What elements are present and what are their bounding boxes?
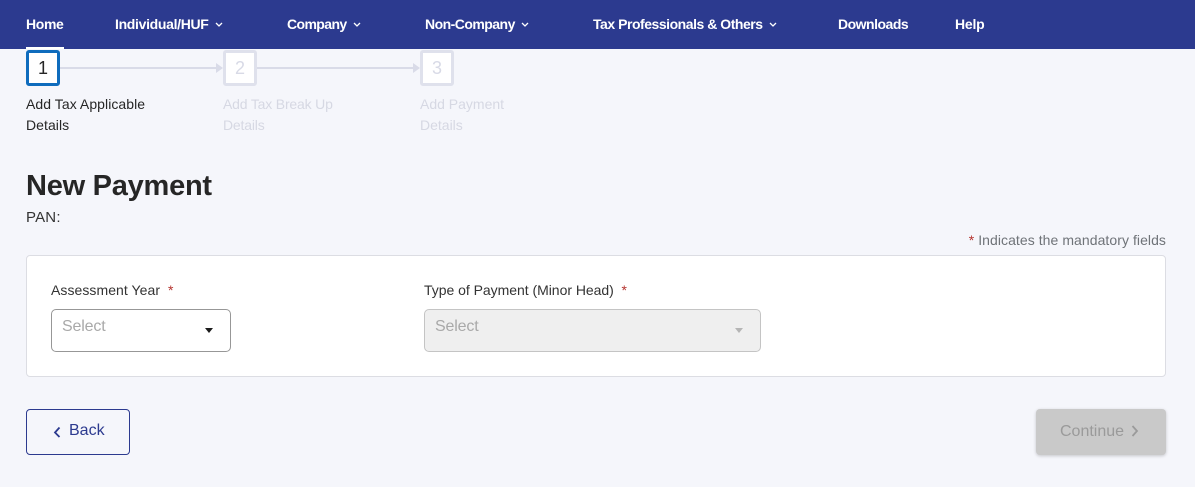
step 1 label: Details [26,117,69,133]
step 3 label: Details [420,117,463,133]
step 1 label: Add Tax Applicable [26,96,145,112]
back button [26,409,130,455]
back chevron [54,426,60,438]
nav item: Individual/HUF: Individual/HUF [115,16,209,32]
arrow: step 1 to 2 [60,63,223,73]
field label: Type of Payment: Type of Payment (Minor Head) * [424,282,627,298]
stepper [60,63,420,73]
arrow: step 2 to 3 [257,63,420,73]
step 3 label: Add Payment [420,96,504,112]
step 2 box [223,50,257,86]
mandatory note: * Indicates the mandatory fields [969,232,1166,248]
continue button (disabled) [1036,409,1166,455]
nav item: Company: Company [287,16,347,32]
step 3 box [420,50,454,86]
step 3 box: 3 [432,58,442,78]
select: Assessment Year [51,309,231,352]
continue chevron [1132,426,1138,436]
back text: Back [69,422,105,439]
nav item: Downloads: Downloads [838,16,908,32]
PAN label: PAN: [26,209,61,226]
step 1 box [26,50,60,86]
form panel [26,255,1166,377]
nav item: Help: Help [955,16,985,32]
step 2 label [223,96,333,133]
step 2 box: 2 [235,58,245,78]
select: Type of Payment (disabled) [424,309,761,352]
field label: Assessment Year: Assessment Year * [51,282,174,298]
step 1 box: 1 [38,58,48,78]
placeholder: Select [435,318,479,335]
step 1 label [26,96,145,133]
title: New Payment [26,170,212,202]
dropdown arrow [735,328,743,333]
dropdown arrow [205,328,213,333]
nav item: Home: Home [26,16,64,32]
nav item: Non-Company: Non-Company [425,16,515,32]
step 2 label: Add Tax Break Up [223,96,333,112]
nav item: Tax Professionals & Others: Tax Professionals & Others [593,16,763,32]
navigation bar [0,0,1195,49]
step 2 label: Details [223,117,265,133]
continue text: Continue [1060,423,1124,440]
active nav underline [26,47,64,49]
step 3 label [420,96,504,133]
placeholder: Select [62,318,106,335]
